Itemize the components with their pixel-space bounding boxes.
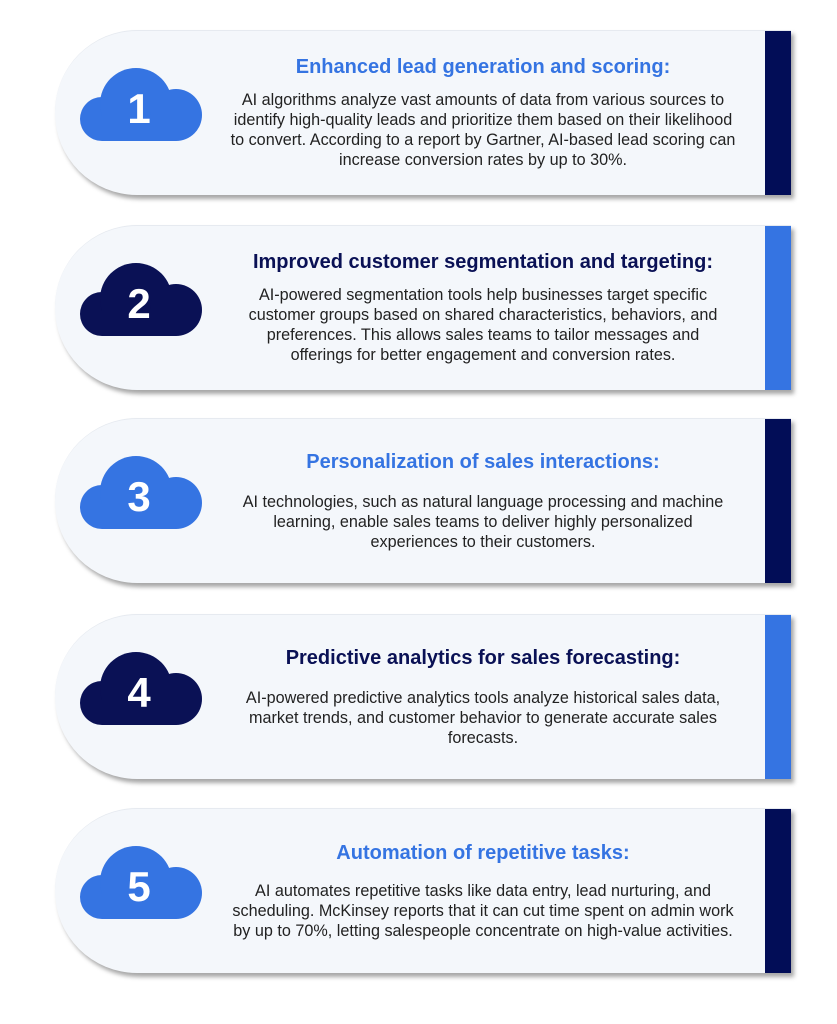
text block 2: customer groups based on shared characteristics, behaviors, and: [249, 306, 717, 324]
text block 3: Personalization of sales interactions:: [306, 450, 660, 472]
text block 5: [232, 842, 734, 940]
text block 1: identify high-quality leads and prioritize them based on their likelihood: [234, 111, 732, 129]
text block 1: Enhanced lead generation and scoring:: [296, 56, 670, 78]
text block 1: to convert. According to a report by Gartner, AI-based lead scoring can: [231, 131, 735, 149]
icon: cloud 3: [80, 456, 202, 529]
text block 3: experiences to their customers.: [371, 532, 595, 550]
text block 5: scheduling. McKinsey reports that it can cut time spent on admin work: [232, 902, 734, 920]
text block 5: AI automates repetitive tasks like data entry, lead nurturing, and: [255, 882, 711, 900]
text block 3: AI technologies, such as natural language processing and machine: [243, 492, 723, 510]
icon: cloud 1: [80, 68, 202, 141]
text block 2: [249, 251, 717, 364]
text block 4: Predictive analytics for sales forecasting:: [286, 646, 680, 668]
bar 2: [765, 226, 791, 390]
card 1: [55, 30, 791, 195]
text block 1: AI algorithms analyze vast amounts of data from various sources to: [242, 91, 724, 109]
bar 3: [765, 419, 791, 583]
bar 5: [765, 809, 791, 973]
icon: cloud 5: [80, 846, 202, 919]
bar 4: [765, 615, 791, 779]
icon: cloud 2: [80, 263, 202, 336]
icon: cloud 5: 5: [127, 863, 151, 910]
card 4: [55, 614, 791, 779]
card 2: [55, 225, 791, 390]
text block 4: AI-powered predictive analytics tools analyze historical sales data,: [246, 688, 720, 706]
bar 1: [765, 31, 791, 195]
text block 4: forecasts.: [448, 728, 518, 746]
text block 1: increase conversion rates by up to 30%.: [339, 151, 627, 169]
text block 2: AI-powered segmentation tools help businesses target specific: [259, 286, 707, 304]
icon: cloud 4: [80, 652, 202, 725]
text block 2: preferences. This allows sales teams to tailor messages and: [267, 326, 699, 344]
text block 2: offerings for better engagement and conversion rates.: [291, 346, 675, 364]
text block 5: Automation of repetitive tasks:: [336, 842, 630, 864]
text block 3: [242, 450, 723, 550]
text block 5: by up to 70%, letting salespeople concentrate on high-value activities.: [233, 922, 733, 940]
card 5: [55, 808, 791, 973]
text block 3: learning, enable sales teams to deliver highly personalized: [273, 512, 693, 530]
text block 4: [246, 646, 720, 746]
icon: cloud 3: 3: [127, 473, 151, 520]
icon: cloud 4: 4: [127, 669, 151, 716]
text block 2: Improved customer segmentation and targeting:: [253, 251, 713, 273]
icon: cloud 2: 2: [127, 280, 151, 327]
card 3: [55, 418, 791, 583]
text block 4: market trends, and customer behavior to generate accurate sales: [249, 708, 717, 726]
icon: cloud 1: 1: [127, 85, 151, 132]
text block 1: [230, 56, 735, 169]
